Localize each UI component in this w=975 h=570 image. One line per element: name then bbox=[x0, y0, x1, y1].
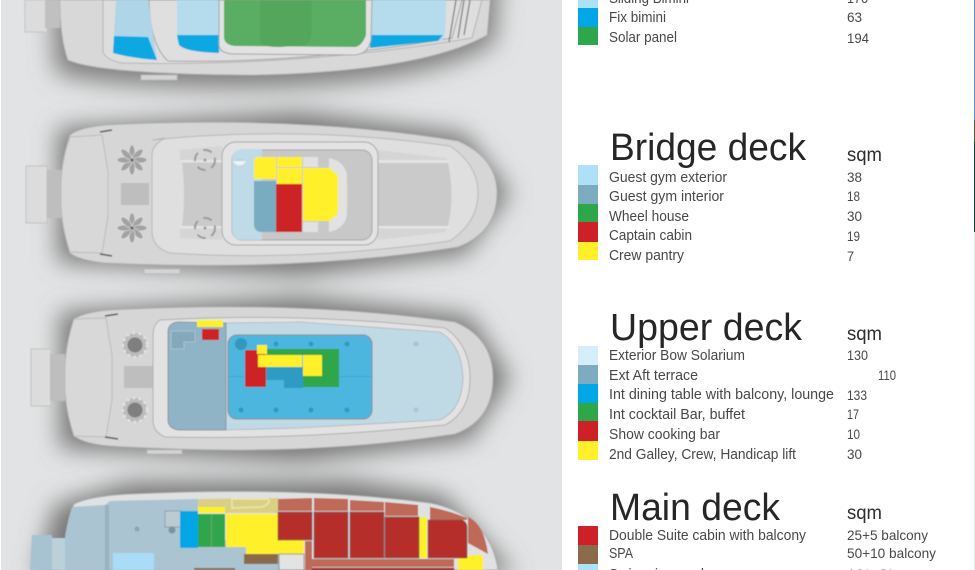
icon: stairs fixture bbox=[134, 511, 181, 534]
legend: bridge deck bbox=[578, 127, 882, 264]
swimming pool bbox=[113, 553, 154, 570]
balconies bbox=[278, 498, 488, 570]
legend values: 30 bbox=[847, 446, 862, 462]
legend values: 19 bbox=[847, 228, 860, 244]
legend labels: Double Suite cabin with balcony bbox=[609, 527, 806, 544]
fixed bimini centre bbox=[177, 35, 443, 53]
unit heading: sqm bbox=[847, 324, 882, 345]
solar panel bbox=[219, 0, 372, 55]
fixed bimini aft bbox=[113, 36, 157, 60]
legend values bbox=[847, 527, 936, 570]
legend labels: Wheel house bbox=[609, 208, 689, 225]
hull outline bbox=[61, 122, 497, 265]
blue room bbox=[180, 511, 198, 548]
legend: main deck bbox=[578, 487, 936, 570]
legend values: 7 bbox=[847, 248, 854, 264]
legend swatches bbox=[578, 346, 598, 460]
legend values: 38 bbox=[847, 169, 862, 185]
legend labels: Ext Aft terrace bbox=[609, 367, 698, 384]
icon: palm trees bbox=[117, 145, 215, 243]
legend labels: Guest gym interior bbox=[609, 188, 724, 205]
legend labels: Crew pantry bbox=[609, 247, 684, 264]
deck floor bbox=[62, 499, 280, 570]
legend swatches bbox=[578, 165, 598, 260]
heading: Main deck bbox=[610, 487, 781, 529]
legend values: 194 bbox=[847, 30, 869, 46]
legend values: 63 bbox=[847, 9, 862, 25]
icon: side step bbox=[141, 75, 177, 80]
sliding bimini centre bbox=[177, 0, 446, 52]
icon: side step bbox=[144, 269, 180, 274]
legend values: 30 bbox=[847, 208, 862, 224]
legend values: 17 bbox=[847, 406, 859, 422]
int dining and lounge bbox=[228, 335, 372, 419]
captain cabin bbox=[276, 184, 302, 232]
icon: stern platform bbox=[26, 166, 62, 223]
exterior bow solarium bbox=[225, 322, 463, 430]
legend labels bbox=[609, 169, 727, 264]
icon: side step bbox=[147, 450, 182, 454]
icon: ceiling lights bbox=[235, 338, 418, 412]
panel: deck plans background bbox=[1, 0, 562, 570]
legend labels: 2nd Galley, Crew, Handicap lift bbox=[609, 446, 797, 463]
sliding bimini aft bbox=[113, 0, 157, 60]
guest gym exterior bbox=[232, 149, 262, 240]
hull outline bbox=[65, 307, 493, 450]
legend labels bbox=[609, 0, 689, 46]
icon: stern platform bbox=[31, 349, 65, 406]
upper cabin bbox=[222, 142, 378, 245]
double suite cabins bbox=[278, 512, 467, 570]
panel: upper deck plan bbox=[31, 296, 510, 462]
stair box bbox=[279, 554, 304, 570]
wheel house console bbox=[329, 158, 347, 232]
legend labels: Captain cabin bbox=[609, 227, 692, 244]
legend values: 130 bbox=[847, 347, 868, 363]
legend labels: Solar panel bbox=[609, 29, 677, 46]
panel: main deck plan bbox=[30, 480, 515, 570]
legend values bbox=[847, 0, 869, 46]
legend labels: SPA bbox=[609, 545, 633, 562]
int cocktail bar bbox=[267, 349, 339, 387]
legend labels: Fix bimini bbox=[609, 9, 666, 26]
ext aft terrace bbox=[168, 322, 226, 430]
edge strip bbox=[974, 0, 975, 570]
panel: sun deck plan bbox=[25, 0, 500, 88]
legend values bbox=[847, 347, 896, 462]
khaki area bbox=[198, 498, 278, 513]
icon: aft stairs bbox=[171, 331, 195, 349]
legend values: 10 bbox=[847, 426, 860, 442]
show cooking exterior bbox=[202, 329, 219, 340]
legend swatches bbox=[578, 526, 598, 570]
legend: upper deck bbox=[578, 307, 896, 463]
legend labels: Exterior Bow Solarium bbox=[609, 347, 745, 364]
legend labels: Show cooking bar bbox=[609, 426, 720, 443]
icon: central stairs bbox=[266, 367, 303, 388]
legend values: 110 bbox=[878, 367, 896, 383]
legend values: 50+10 balcony bbox=[847, 545, 936, 561]
legend labels: Int dining table with balcony, lounge bbox=[609, 386, 834, 403]
spa bbox=[194, 554, 278, 570]
legend swatches bbox=[578, 0, 598, 45]
crew pantry exterior bbox=[197, 320, 223, 327]
yellow service areas bbox=[198, 507, 483, 570]
crew pantry bbox=[254, 157, 338, 221]
stern platform bbox=[30, 535, 65, 570]
icon: anchor winches bbox=[123, 333, 147, 422]
unit heading: sqm bbox=[847, 503, 882, 524]
legend labels bbox=[609, 347, 834, 463]
unit heading: sqm bbox=[847, 145, 882, 166]
show cooking bar bbox=[245, 350, 266, 387]
legend labels: Guest gym exterior bbox=[609, 169, 727, 186]
hull outline bbox=[62, 491, 498, 570]
heading: Bridge deck bbox=[610, 127, 807, 169]
legend values: 18 bbox=[847, 188, 860, 204]
legend values: 133 bbox=[847, 387, 867, 403]
heading: Upper deck bbox=[610, 307, 803, 349]
guest gym interior bbox=[254, 181, 276, 232]
green room bbox=[198, 514, 225, 547]
galley and crew bbox=[257, 345, 322, 376]
panel: bridge deck plan bbox=[26, 112, 510, 276]
legend labels bbox=[609, 527, 806, 570]
legend values: 25+5 balcony bbox=[847, 527, 928, 543]
icon: gym hatch bbox=[233, 159, 246, 165]
legend values bbox=[847, 169, 862, 264]
legend labels: Int cocktail Bar, buffet bbox=[609, 406, 746, 423]
legend: sun deck bbox=[578, 0, 869, 46]
